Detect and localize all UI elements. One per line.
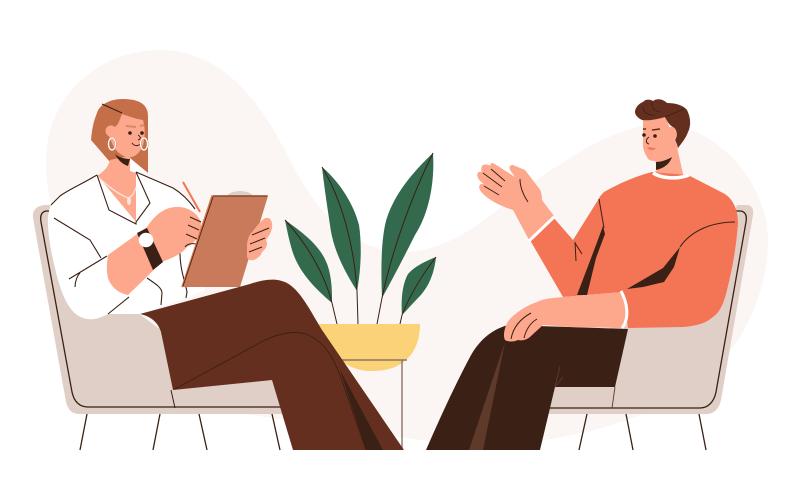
hair tie line (102, 104, 122, 113)
hand finger lines (249, 228, 269, 252)
chair body (33, 205, 285, 414)
chair inner line (41, 211, 282, 407)
leaf: far left (285, 220, 337, 324)
background blob (46, 50, 768, 446)
necklace (98, 177, 136, 198)
sweater collar (653, 173, 689, 178)
neck (97, 156, 136, 222)
clipboard (182, 196, 268, 287)
pen (183, 182, 200, 212)
face (108, 114, 145, 157)
trouser crease (175, 333, 366, 450)
chair headrest (227, 191, 253, 203)
hair lines (643, 102, 684, 117)
facial features (129, 132, 143, 146)
watch face (139, 233, 153, 247)
trouser highlight (469, 342, 505, 450)
ear (106, 126, 116, 136)
facial features (643, 134, 656, 144)
neck shadow (656, 157, 672, 170)
hair (635, 99, 690, 148)
neck shadow (115, 154, 130, 166)
sweater cuff (529, 217, 554, 241)
pendant (127, 197, 131, 205)
chair legs (80, 414, 280, 450)
leaf: centre left (322, 167, 361, 324)
earrings (108, 138, 148, 150)
trousers (140, 280, 404, 450)
shirt outlines (51, 172, 195, 314)
leaf: far right (400, 257, 436, 324)
trousers (426, 325, 628, 450)
trouser shadow (340, 370, 383, 450)
raised hand (477, 163, 554, 240)
face (643, 116, 678, 161)
holding hand (247, 218, 272, 260)
chair inner line (545, 211, 746, 408)
seat divider (171, 390, 175, 408)
pot stand (340, 360, 407, 450)
right chair (545, 205, 753, 450)
mouth (647, 147, 656, 150)
resting cuff (621, 291, 627, 328)
sweater (530, 172, 738, 328)
writing arm (107, 207, 201, 295)
leaf: centre right (377, 153, 433, 324)
sweater lines (575, 199, 735, 261)
resting arm (504, 292, 627, 342)
potted plant (285, 153, 436, 450)
neck (652, 143, 684, 178)
eyebrows (643, 129, 660, 130)
trouser line (555, 366, 615, 408)
shirt back collar (130, 159, 148, 173)
left chair (33, 191, 285, 450)
shirt (48, 172, 205, 319)
ear (666, 126, 680, 140)
eyebrows (126, 125, 144, 127)
watch band (137, 228, 163, 270)
finger lines (185, 217, 201, 247)
chair body (545, 205, 753, 414)
sweater shadows (577, 226, 680, 295)
man (426, 99, 738, 450)
chair legs (579, 414, 706, 450)
woman (48, 99, 404, 450)
hair (91, 99, 148, 173)
yellow pot (318, 324, 420, 371)
